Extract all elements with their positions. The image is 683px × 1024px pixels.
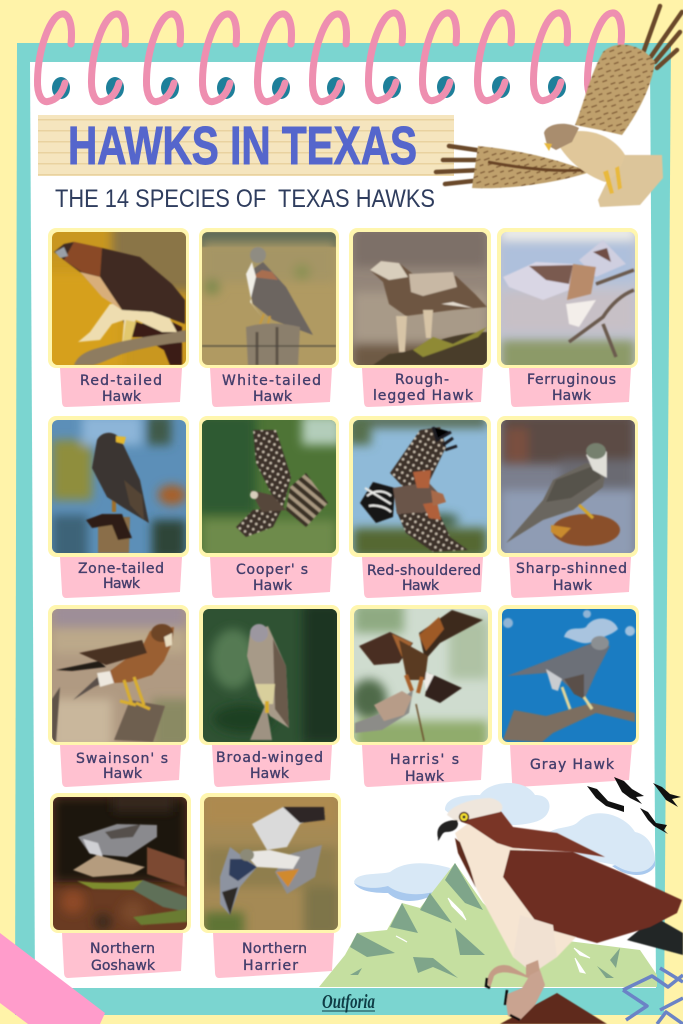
pink corner shape (0, 933, 105, 1024)
card: Northern Goshawk (50, 792, 191, 978)
hawk upper wing (575, 45, 655, 135)
subtitle: THE 14 SPECIES OF TEXAS HAWKS (55, 185, 435, 213)
card: Zone-tailed Hawk (48, 415, 189, 598)
label: Swainson's Hawk: Hawk (103, 766, 143, 782)
label: Northern Harrier (213, 933, 334, 978)
label: Rough-legged Hawk (362, 368, 483, 407)
label: Red-tailed Hawk: Hawk (102, 389, 142, 405)
snowflake outline (623, 968, 683, 1024)
label: Northern Goshawk (62, 933, 183, 978)
label: Northern Goshawk: Northern (90, 941, 155, 957)
spiral binding (37, 13, 622, 102)
title: HAWKS IN TEXAS (68, 116, 417, 176)
photo: Ferruginous Hawk (501, 232, 635, 365)
photo: Zone-tailed Hawk (52, 420, 186, 553)
label: Broad-winged Hawk (212, 745, 332, 787)
label: Ferruginous Hawk: Hawk (552, 388, 592, 404)
label: Rough-legged Hawk: legged Hawk (373, 388, 474, 404)
label: Northern Harrier: Harrier (243, 958, 298, 974)
label: Red-tailed Hawk: Red-tailed (80, 373, 162, 389)
hawk tail (598, 155, 663, 207)
label: Ferruginous Hawk: Ferruginous (527, 372, 616, 388)
hawk left wing (472, 146, 590, 188)
hawk beak and legs (544, 143, 622, 194)
card: Red-tailed Hawk (48, 228, 189, 407)
label: White-tailed Hawk: Hawk (253, 389, 293, 405)
label: Sharp-shinned Hawk: Hawk (553, 578, 593, 594)
card: Ferruginous Hawk (497, 226, 638, 407)
photo: Rough-legged Hawk (353, 227, 487, 374)
label: Red-shouldered Hawk: Red-shouldered (367, 563, 481, 579)
label: Ferruginous Hawk (509, 368, 631, 407)
label: Swainson's Hawk: Swainson' s (76, 751, 168, 767)
label: Northern Harrier: Northern (242, 941, 307, 957)
photo: Gray Hawk (502, 609, 636, 742)
photo: Swainson's Hawk (52, 609, 186, 742)
illustration: flying hawk (436, 6, 682, 207)
photo: Broad-winged Hawk (203, 603, 343, 743)
label: Zone-tailed Hawk (60, 557, 182, 598)
card: Cooper's Hawk (196, 414, 342, 598)
label: Sharp-shinned Hawk: Sharp-shinned (516, 561, 627, 577)
label: Sharp-shinned Hawk (509, 557, 631, 598)
photo: Red-shouldered Hawk (353, 420, 487, 553)
photo: Northern Harrier (204, 797, 338, 930)
label: Swainson's Hawk (60, 745, 181, 787)
label: Zone-tailed Hawk: Hawk (103, 576, 141, 592)
label: Red-shouldered Hawk (362, 557, 483, 598)
illustration: clouds (354, 783, 655, 901)
illustration: mountains (319, 863, 657, 987)
photo: White-tailed Hawk (202, 232, 336, 365)
label: Zone-tailed Hawk: Zone-tailed (78, 561, 164, 577)
label: Harris's Hawk (362, 745, 483, 787)
title banner (38, 115, 454, 176)
label: Harris's Hawk: Hawk (405, 769, 445, 785)
label: Gray Hawk (510, 745, 632, 787)
hawk wing band (488, 162, 584, 171)
photo: Northern Goshawk (53, 792, 187, 931)
label: Broad-winged Hawk: Hawk (250, 766, 290, 782)
illustration: osprey (437, 798, 683, 1024)
logo: Outforia (322, 991, 375, 1013)
label: Harris's Hawk: Harris' s (390, 752, 459, 768)
card: Swainson's Hawk (48, 603, 192, 787)
photo: Cooper's Hawk (202, 420, 336, 553)
card: Gray Hawk (498, 605, 639, 787)
card: Red-shouldered Hawk (347, 414, 491, 598)
card: Harris's Hawk (350, 603, 492, 787)
card: Rough-legged Hawk (349, 227, 491, 407)
label: Red-shouldered Hawk: Hawk (402, 578, 440, 594)
label: Rough-legged Hawk: Rough- (395, 372, 449, 388)
label: White-tailed Hawk (210, 368, 332, 407)
hawk wing feathers (436, 6, 682, 184)
card: White-tailed Hawk (199, 228, 339, 407)
card: Sharp-shinned Hawk (497, 414, 638, 598)
label: Cooper's Hawk (210, 557, 332, 598)
photo: Harris's Hawk (354, 609, 488, 742)
label: Cooper's Hawk: Cooper' s (236, 562, 308, 578)
hawk body (555, 131, 625, 182)
label: White-tailed Hawk: White-tailed (222, 373, 321, 389)
label: Broad-winged Hawk: Broad-winged (216, 750, 323, 766)
label: Gray Hawk: Gray Hawk (530, 757, 615, 773)
photo: Red-tailed Hawk (52, 232, 186, 365)
label: Red-tailed Hawk (60, 368, 182, 407)
label: Northern Goshawk: Goshawk (91, 958, 156, 974)
photo: Sharp-shinned Hawk (501, 414, 635, 560)
illustration: flock of birds (587, 777, 681, 834)
label: Cooper's Hawk: Hawk (253, 578, 293, 594)
card: Northern Harrier (200, 791, 341, 978)
hawk head (544, 124, 579, 150)
card: Broad-winged Hawk (199, 603, 343, 787)
